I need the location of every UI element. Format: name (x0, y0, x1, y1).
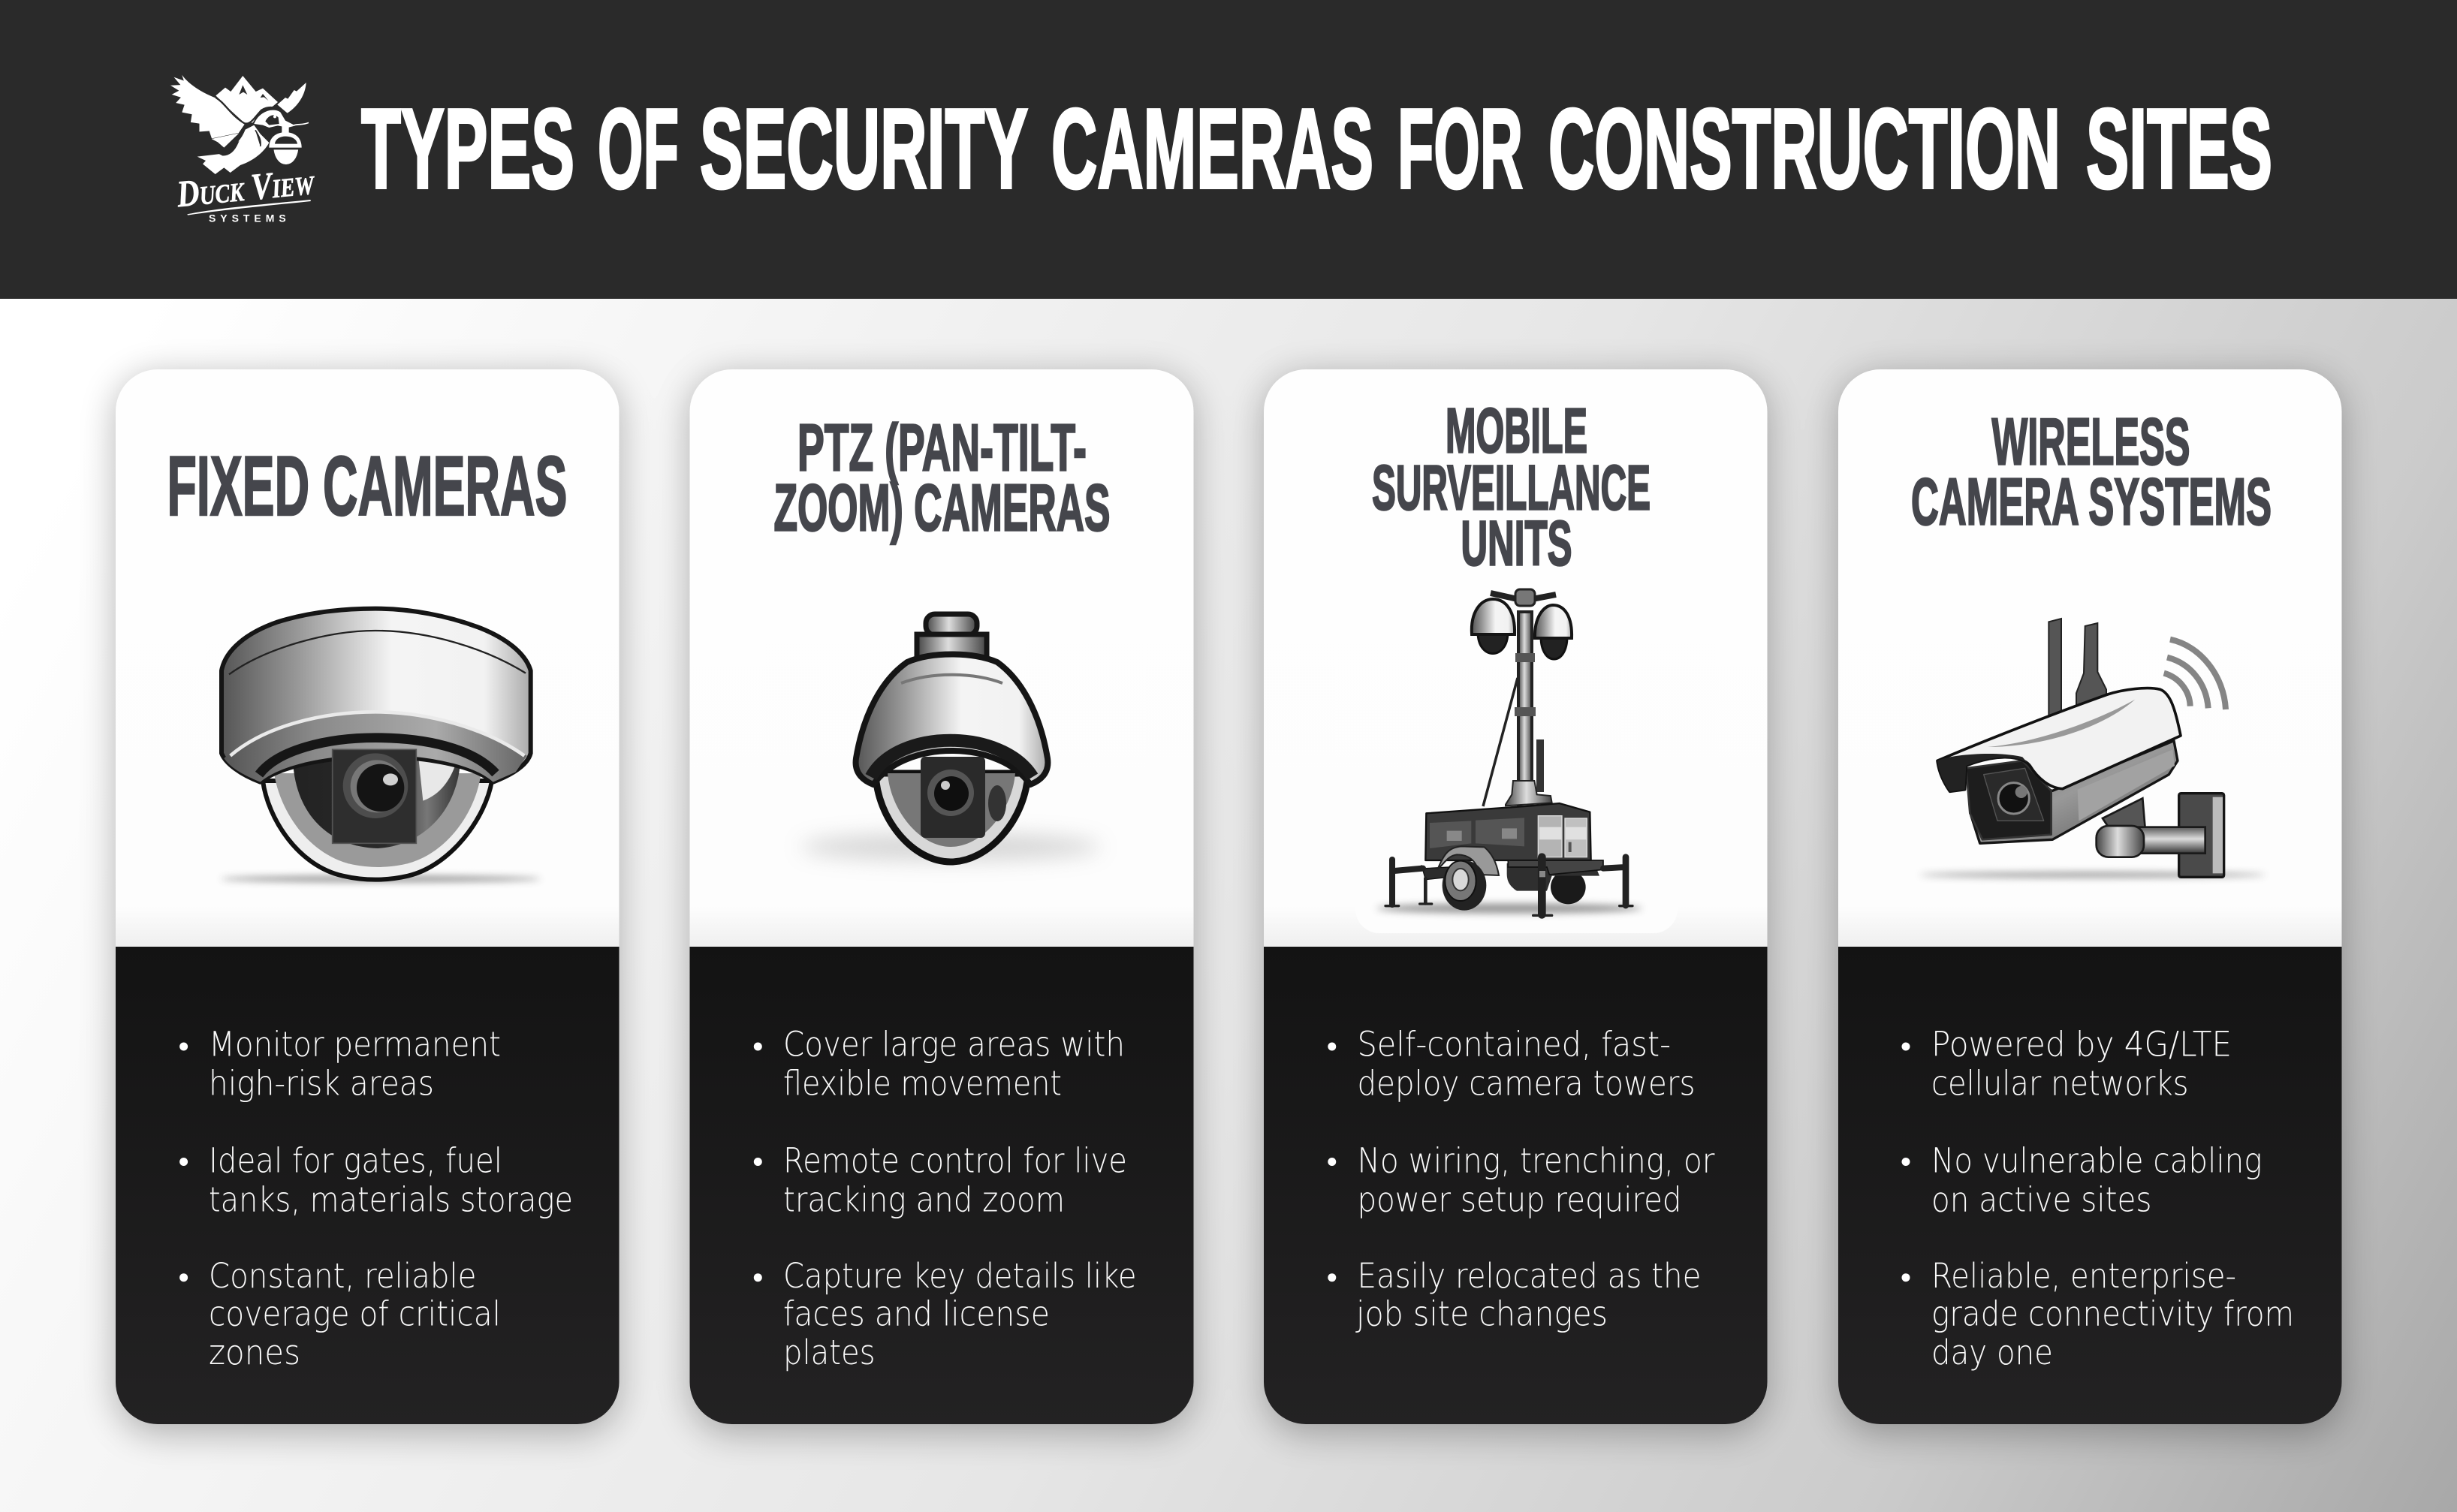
title: SITES (2086, 85, 2272, 212)
bullet list: tracking and zoom (783, 1180, 1065, 1219)
icon: mountain (216, 76, 278, 122)
bullet list: faces and license (783, 1294, 1050, 1333)
bullet list: plates (783, 1333, 876, 1372)
heading: mobile surveillance units: SURVEILLANCE (1372, 452, 1651, 523)
header band (0, 0, 2457, 299)
bullet list: Remote control for live (783, 1141, 1127, 1180)
panel: PTZ cameras (689, 369, 1194, 1424)
bullet list: flexible movement (783, 1063, 1062, 1104)
icon: duck body (197, 125, 269, 174)
bullet list (179, 1024, 573, 1372)
icon: mobile camera tower (1376, 589, 1642, 915)
heading: PTZ cameras: ZOOM) CAMERAS (773, 470, 1110, 545)
icon: duck wing (169, 73, 246, 139)
icon: wifi signal arcs (2164, 640, 2226, 709)
card shadows (116, 375, 2341, 1434)
bullet list: Constant, reliable (209, 1256, 476, 1296)
bullet list: day one (1931, 1333, 2053, 1372)
bullet list: Cover large areas with (783, 1024, 1125, 1065)
heading: mobile surveillance units: MOBILE (1446, 395, 1587, 465)
bullet list (1328, 1024, 1715, 1333)
bullet list: cellular networks (1931, 1063, 2188, 1104)
logo: Duck View Systems (169, 73, 318, 224)
icon: dome camera (221, 609, 541, 882)
bullet list: Monitor permanent (209, 1024, 501, 1065)
bullet list: Ideal for gates, fuel (209, 1141, 502, 1180)
bullet list: job site changes (1355, 1294, 1608, 1333)
bullet list: No wiring, trenching, or (1358, 1141, 1715, 1180)
icon: duck head and bill (254, 110, 295, 128)
icon: PTZ dome camera (800, 614, 1101, 862)
bullet list: Easily relocated as the (1358, 1256, 1702, 1296)
title: CONSTRUCTION (1548, 85, 2061, 212)
bullet list: tanks, materials storage (209, 1180, 573, 1219)
heading: wireless camera systems: WIRELESS (1991, 404, 2190, 479)
panel: mobile surveillance units (1264, 369, 1768, 1424)
bullet list (1901, 1024, 2294, 1372)
title: CAMERAS (1051, 85, 1373, 212)
heading: PTZ cameras (773, 410, 1110, 545)
heading: wireless camera systems (1911, 404, 2272, 539)
title (361, 85, 2272, 212)
icon: wireless bullet camera (1920, 619, 2266, 878)
title: OF (598, 85, 679, 212)
heading: mobile surveillance units (1372, 395, 1651, 578)
logo wordmark: Duck View (174, 160, 318, 215)
title: FOR (1397, 85, 1523, 212)
bullet list: coverage of critical (209, 1294, 501, 1333)
heading: PTZ cameras: PTZ (PAN-TILT- (797, 410, 1087, 485)
panel: fixed cameras (116, 369, 619, 1424)
bullet list: No vulnerable cabling (1931, 1141, 2262, 1180)
bullet list (754, 1024, 1137, 1372)
panel: wireless camera systems (1838, 369, 2341, 1424)
bullet list: Reliable, enterprise- (1931, 1256, 2236, 1296)
heading: fixed cameras: FIXED CAMERAS (167, 439, 568, 533)
bullet list: Self-contained, fast- (1358, 1024, 1671, 1065)
bullet list: zones (209, 1333, 300, 1372)
icon: dome camera held by duck (269, 126, 302, 165)
title: SECURITY (700, 85, 1028, 212)
bullet list: deploy camera towers (1358, 1063, 1696, 1104)
heading: mobile surveillance units: UNITS (1461, 508, 1572, 578)
trailer (1376, 781, 1642, 915)
title: TYPES (361, 85, 574, 212)
logo subtitle: SYSTEMS (209, 212, 286, 224)
bullet list: Powered by 4G/LTE (1931, 1024, 2232, 1065)
bullet list: grade connectivity from (1931, 1294, 2294, 1333)
bullet list: high-risk areas (209, 1063, 434, 1104)
bullet list: on active sites (1931, 1180, 2152, 1219)
icon: far wing (277, 83, 306, 113)
bullet list: power setup required (1358, 1180, 1682, 1219)
bullet list: Capture key details like (783, 1256, 1137, 1296)
